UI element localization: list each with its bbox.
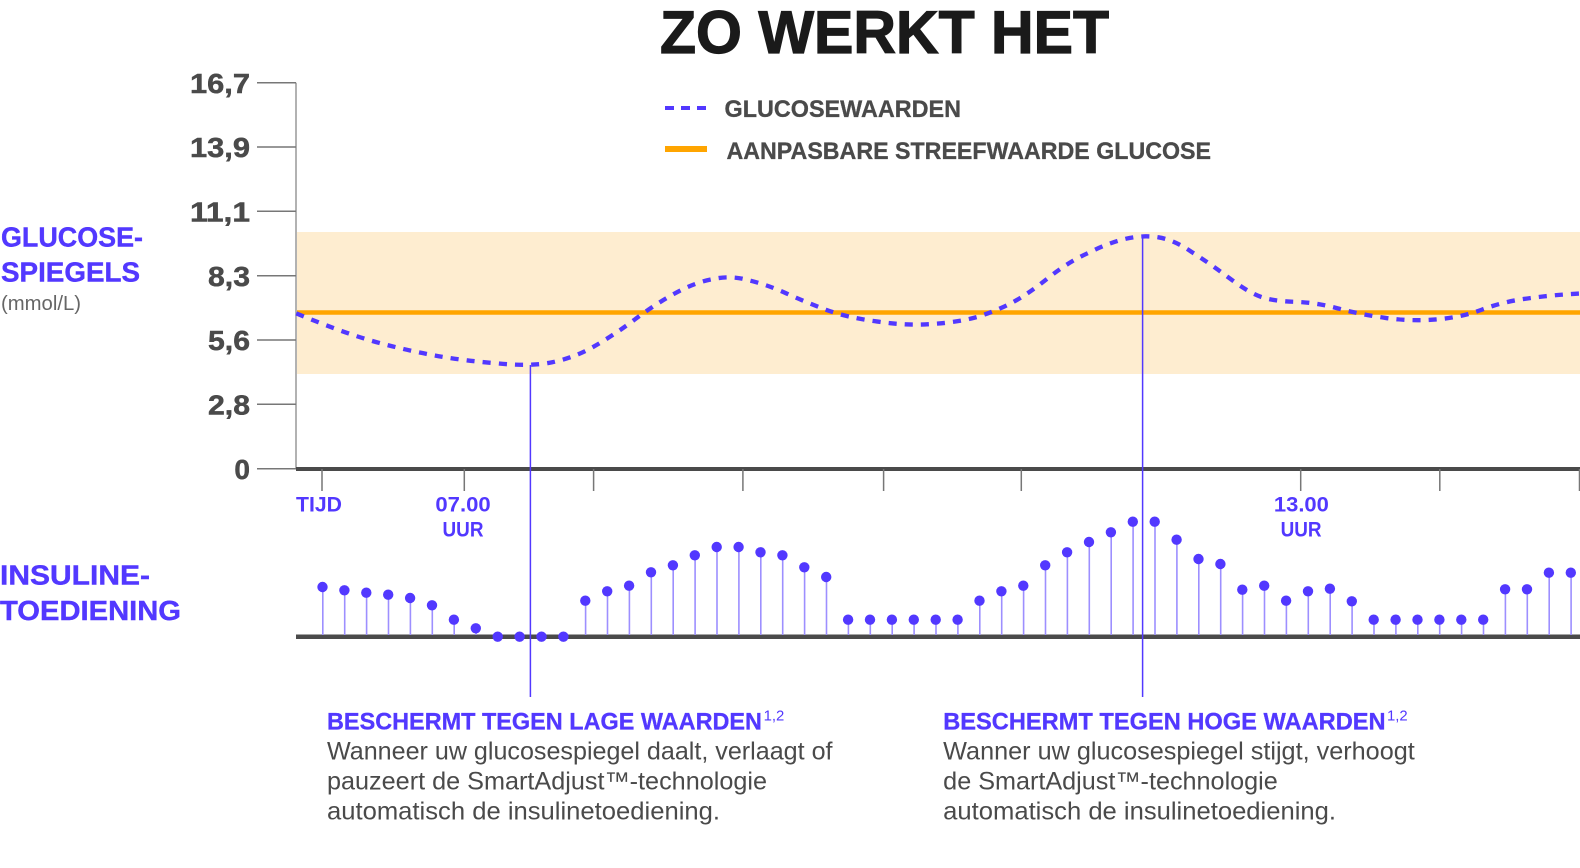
time axis: UUR xyxy=(442,519,484,542)
y axis: 5,6 xyxy=(208,325,250,356)
y axis: 16,7 xyxy=(190,68,250,99)
y axis: 13,9 xyxy=(190,132,250,163)
time axis xyxy=(296,469,1580,542)
title: ZO WERKT HET xyxy=(660,0,1109,66)
y axis xyxy=(190,68,296,485)
time axis: TIJD xyxy=(296,494,342,517)
callout: protects against high values: Wanner uw glucosespiegel stijgt, verhoogt xyxy=(943,737,1415,765)
y axis: 11,1 xyxy=(190,196,250,228)
callout line: high values xyxy=(1142,237,1144,697)
legend xyxy=(665,96,1211,165)
glucose levels label: SPIEGELS xyxy=(1,257,140,288)
y axis: 8,3 xyxy=(208,261,250,292)
callout: protects against low values: BESCHERMT TEGEN LAGE WAARDEN xyxy=(327,708,762,735)
target range band xyxy=(297,232,1580,374)
insulin delivery label xyxy=(0,560,181,626)
callout: protects against high values: de SmartAdjust™-technologie xyxy=(943,767,1278,795)
glucose levels label xyxy=(1,222,143,315)
time axis: 07.00 xyxy=(435,494,491,517)
legend: AANPASBARE STREEFWAARDE GLUCOSE xyxy=(726,138,1211,165)
callout: protects against high values: automatisch de insulinetoediening. xyxy=(943,797,1336,825)
glucose levels label: (mmol/L) xyxy=(1,293,81,315)
callout: protects against high values xyxy=(943,708,1415,825)
target glucose line xyxy=(297,310,1580,315)
callout: protects against high values: 1,2 xyxy=(1387,708,1408,725)
legend: GLUCOSEWAARDEN xyxy=(724,96,961,123)
callout: protects against low values: 1,2 xyxy=(764,708,784,725)
insulin delivery label: INSULINE- xyxy=(0,560,150,590)
glucose curve xyxy=(296,236,1580,365)
time axis: 13.00 xyxy=(1274,494,1329,517)
callout: protects against low values: Wanneer uw glucosespiegel daalt, verlaagt of xyxy=(327,737,833,765)
glucose levels label: GLUCOSE- xyxy=(1,222,143,253)
time axis: UUR xyxy=(1281,519,1322,542)
y axis: 2,8 xyxy=(208,390,250,420)
insulin baseline xyxy=(296,634,1580,639)
callout: protects against high values: BESCHERMT TEGEN HOGE WAARDEN xyxy=(943,708,1386,735)
y axis: 0 xyxy=(234,454,250,485)
insulin delivery label: TOEDIENING xyxy=(0,595,181,626)
insulin delivery stems and dots xyxy=(317,516,1576,642)
callout: protects against low values: pauzeert de SmartAdjust™-technologie xyxy=(327,767,767,795)
callout: protects against low values: automatisch de insulinetoediening. xyxy=(327,797,720,825)
callout line: low values xyxy=(529,365,531,697)
callout: protects against low values xyxy=(327,708,833,825)
